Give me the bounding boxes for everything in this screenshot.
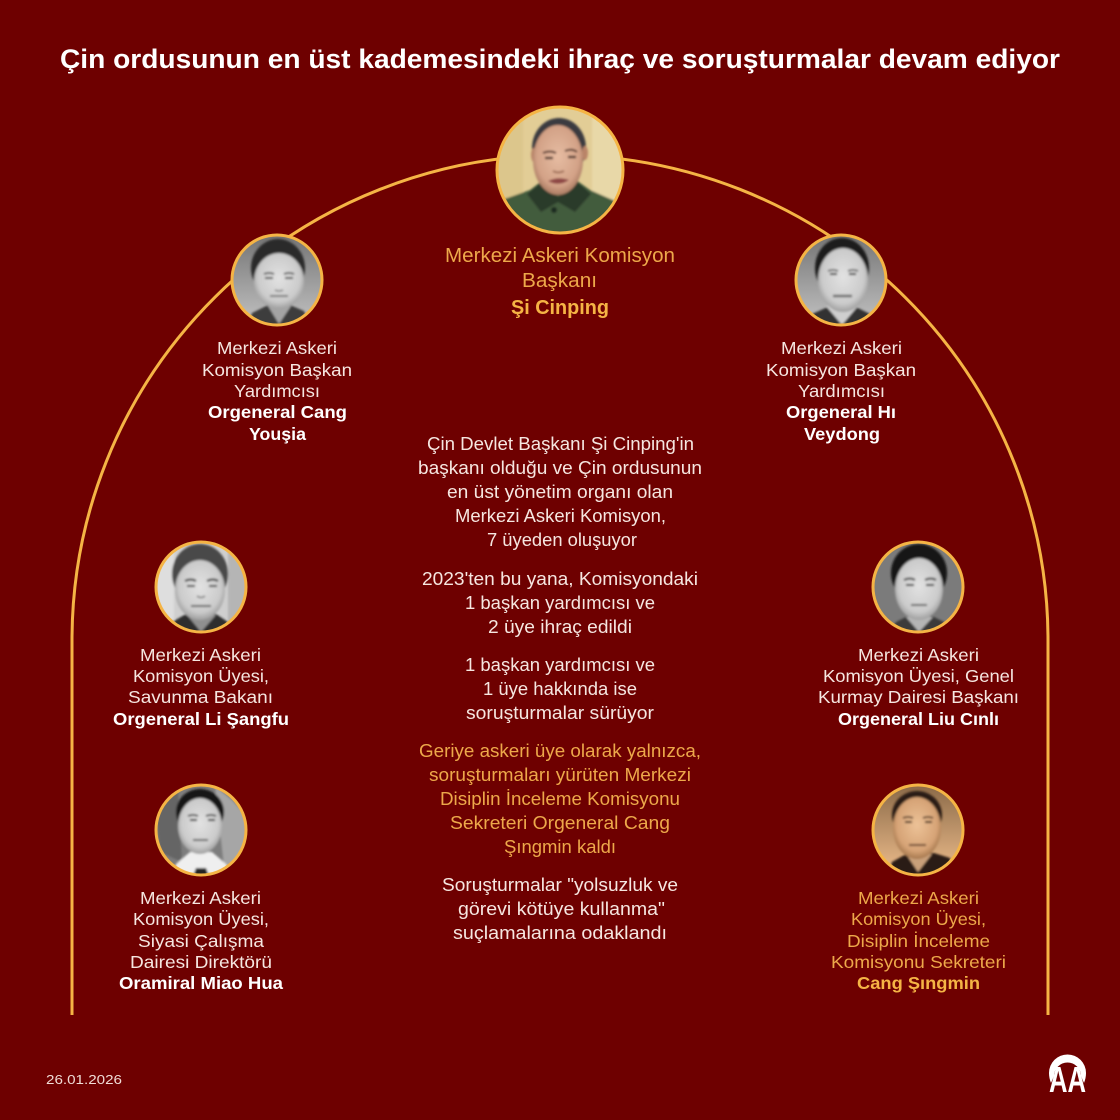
- member: Şi Cinping: [445, 107, 675, 319]
- label: Cang Şıngmin: [831, 888, 1006, 993]
- center text: commission overview: [418, 434, 702, 550]
- center text: investigations: soruşturmalar sürüyor: [466, 703, 654, 723]
- label: Cang Şıngmin: Komisyon Üyesi,: [851, 909, 986, 929]
- portrait: Cang Youşia: [232, 235, 322, 326]
- label: Hı Veydong: Yardımcısı: [798, 381, 885, 401]
- label: Miao Hua: Komisyon Üyesi,: [133, 909, 269, 929]
- label: Hı Veydong: Komisyon Başkan: [766, 360, 916, 380]
- label: Liu Cınlı: [818, 645, 1019, 729]
- center text: charges: suçlamalarına odaklandı: [453, 923, 667, 943]
- label: Cang Youşia: Yardımcısı: [234, 381, 320, 401]
- title: Çin ordusunun en üst kademesindeki ihraç ve soruşturmalar devam ediyor: [60, 44, 1061, 74]
- portrait: Cang Şıngmin: [873, 785, 963, 878]
- member: Miao Hua: [119, 785, 283, 993]
- label: Li Şangfu: Komisyon Üyesi,: [133, 666, 269, 686]
- label: Liu Cınlı: Komisyon Üyesi, Genel: [823, 666, 1014, 686]
- center text: charges: görevi kötüye kullanma": [458, 899, 665, 919]
- label: Şi Cinping: Şi Cinping: [511, 297, 609, 319]
- center text: investigations: 1 başkan yardımcısı ve: [465, 655, 655, 675]
- member: Hı Veydong: [766, 235, 916, 444]
- center text: commission overview: Çin Devlet Başkanı Şi Cinping'in: [427, 434, 694, 454]
- label: Li Şangfu: Savunma Bakanı: [128, 687, 273, 707]
- center text: commission overview: başkanı olduğu ve Çin ordusunun: [418, 458, 702, 478]
- icon: agency logo: AA: [1049, 1059, 1086, 1100]
- center text: commission overview: Merkezi Askeri Komisyon,: [455, 506, 666, 526]
- label: Cang Youşia: Merkezi Askeri: [217, 338, 337, 358]
- label: Liu Cınlı: Merkezi Askeri: [858, 645, 979, 665]
- label: Cang Şıngmin: Disiplin İnceleme: [847, 931, 990, 951]
- label: Li Şangfu: Orgeneral Li Şangfu: [113, 709, 289, 729]
- label: Hı Veydong: Veydong: [804, 424, 880, 444]
- label: Cang Şıngmin: Cang Şıngmin: [857, 973, 980, 993]
- label: Li Şangfu: Merkezi Askeri: [140, 645, 261, 665]
- member: Liu Cınlı: [818, 542, 1019, 729]
- label: Şi Cinping: Merkezi Askeri Komisyon: [445, 245, 675, 267]
- label: Hı Veydong: [766, 338, 916, 444]
- portrait: Şi Cinping: [496, 107, 624, 236]
- portrait: Li Şangfu: [156, 542, 248, 634]
- center text: expulsions: 1 başkan yardımcısı ve: [465, 593, 655, 613]
- member: Cang Youşia: [202, 235, 352, 444]
- label: Şi Cinping: [445, 245, 675, 319]
- center text: remaining member highlight: Disiplin İnceleme Komisyonu: [440, 789, 680, 809]
- label: Liu Cınlı: Kurmay Dairesi Başkanı: [818, 687, 1019, 707]
- label: Li Şangfu: [113, 645, 289, 729]
- center text: investigations: 1 üye hakkında ise: [483, 679, 637, 699]
- label: Miao Hua: Merkezi Askeri: [140, 888, 261, 908]
- center text: expulsions: [422, 569, 698, 637]
- center text: expulsions: 2023'ten bu yana, Komisyondaki: [422, 569, 698, 589]
- center text: remaining member highlight: soruşturmaları yürüten Merkezi: [429, 765, 691, 785]
- date: 26.01.2026: [46, 1072, 122, 1087]
- center text: remaining member highlight: Şıngmin kaldı: [504, 837, 616, 857]
- portrait: Hı Veydong: [796, 235, 886, 326]
- label: Hı Veydong: Merkezi Askeri: [781, 338, 902, 358]
- label: Cang Youşia: Orgeneral Cang: [208, 402, 347, 422]
- label: Hı Veydong: Orgeneral Hı: [786, 402, 896, 422]
- label: Miao Hua: Siyasi Çalışma: [138, 931, 264, 951]
- portrait: Miao Hua: [156, 785, 246, 878]
- portrait: Liu Cınlı: [873, 542, 963, 634]
- label: Cang Youşia: Komisyon Başkan: [202, 360, 352, 380]
- center text: remaining member highlight: Geriye askeri üye olarak yalnızca,: [419, 741, 701, 761]
- label: Cang Youşia: Youşia: [249, 424, 306, 444]
- center text: commission overview: 7 üyeden oluşuyor: [487, 530, 637, 550]
- member: Li Şangfu: [113, 542, 289, 729]
- center text: remaining member highlight: Sekreteri Orgeneral Cang: [450, 813, 670, 833]
- arch connecting the commission members: [72, 155, 1048, 1015]
- label: Miao Hua: [119, 888, 283, 993]
- center text: remaining member highlight: [419, 741, 701, 857]
- center text: investigations: [465, 655, 655, 723]
- label: Miao Hua: Dairesi Direktörü: [130, 952, 272, 972]
- member: Cang Şıngmin: [831, 785, 1006, 993]
- icon: agency logo: [1049, 1054, 1086, 1100]
- label: Miao Hua: Oramiral Miao Hua: [119, 973, 283, 993]
- label: Şi Cinping: Başkanı: [522, 270, 597, 292]
- label: Cang Şıngmin: Merkezi Askeri: [858, 888, 979, 908]
- center text: charges: Soruşturmalar "yolsuzluk ve: [442, 875, 678, 895]
- center text: charges: [442, 875, 678, 943]
- label: Cang Şıngmin: Komisyonu Sekreteri: [831, 952, 1006, 972]
- label: Liu Cınlı: Orgeneral Liu Cınlı: [838, 709, 999, 729]
- center text: expulsions: 2 üye ihraç edildi: [488, 617, 632, 637]
- label: Cang Youşia: [202, 338, 352, 444]
- center text: commission overview: en üst yönetim organı olan: [447, 482, 673, 502]
